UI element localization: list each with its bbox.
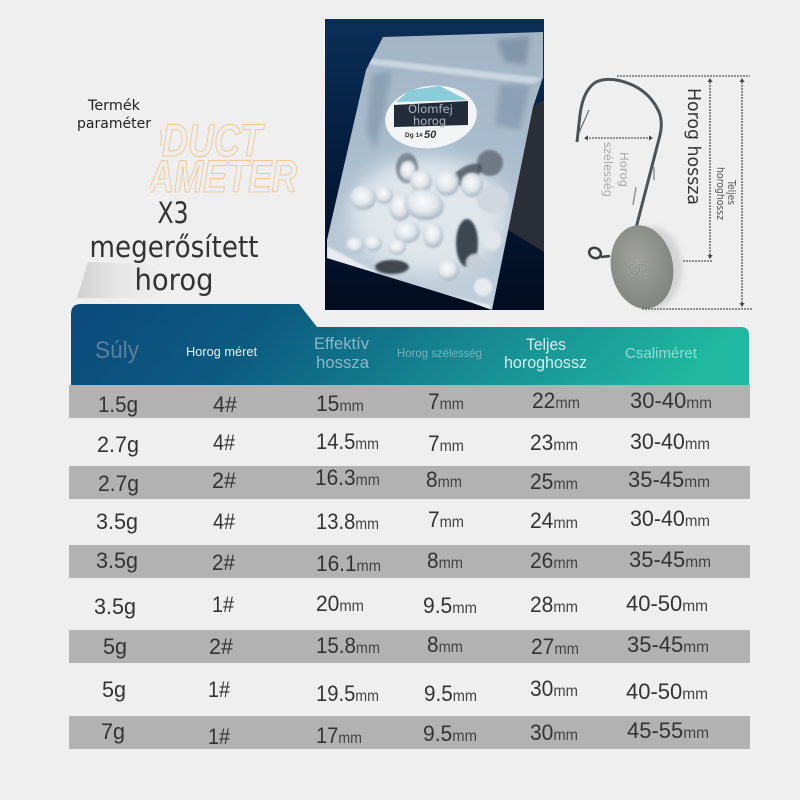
outlined watermark: product parameter: PARAMETER: [77, 151, 297, 202]
bag label: Olomfej horog: Dg 1#: [405, 132, 423, 139]
label: Teljes horoghossz: Teljes: [725, 179, 737, 205]
header: Effektív hossza: hossza: [316, 353, 370, 372]
row 4: 3.5g: [96, 509, 138, 534]
title: X3 reinforced hook: X3: [158, 196, 188, 230]
row 9: 45-55mm: [627, 718, 709, 743]
table header: [71, 304, 749, 385]
row 4: 13.8mm: [316, 509, 379, 534]
row 5: 16.1mm: [316, 551, 381, 576]
row stripe backgrounds: [69, 385, 750, 749]
row 2: [97, 429, 710, 457]
row 8: 5g: [102, 677, 126, 702]
icon: jig hook: [577, 79, 682, 314]
icon: jig hook: 5: [623, 262, 653, 276]
row 2: 23mm: [530, 430, 578, 455]
row 4: [96, 506, 710, 534]
bag label: Olomfej horog: 50: [424, 129, 437, 141]
outlined watermark: product parameter: PRODUCT: [84, 115, 265, 166]
header: Effektív hossza: Effektív: [314, 334, 369, 353]
header: Horog méret: Horog méret: [186, 344, 257, 359]
row 9: 7g: [101, 719, 125, 744]
label: Termék paraméter: paraméter: [77, 116, 151, 132]
row 2: 14.5mm: [316, 429, 379, 454]
row 2: 2.7g: [97, 432, 139, 457]
row 8: 9.5mm: [424, 681, 477, 706]
header: Effektív hossza: [314, 334, 370, 372]
header: Teljes horoghossz: Teljes: [526, 335, 566, 354]
diagram: hook with dimensions: [577, 76, 752, 314]
row 4: 4#: [213, 509, 236, 534]
outlined watermark: product parameter: [150, 124, 298, 192]
row 7: 35-45mm: [627, 632, 709, 657]
row 5: 35-45mm: [629, 547, 711, 572]
row 8: 19.5mm: [316, 681, 379, 706]
label: Horog hossza: Horog hossza: [683, 88, 704, 205]
row 5: 3.5g: [96, 548, 138, 573]
label: Horog szélesség: [601, 142, 631, 197]
header: Csaliméret: Csaliméret: [625, 345, 698, 362]
label: Termék paraméter: [77, 98, 151, 132]
row 3: 16.3mm: [315, 465, 380, 490]
row 1: 30-40mm: [630, 388, 712, 413]
row 7: 15.8mm: [316, 633, 380, 658]
row 7: 8mm: [427, 632, 463, 657]
row 1: 15mm: [316, 391, 364, 416]
dashed dimension lines: [586, 76, 752, 309]
row 3: 25mm: [530, 469, 578, 494]
row 1: 1.5g: [98, 392, 138, 417]
row 9: [101, 718, 709, 749]
title: X3 reinforced hook: megerősített: [90, 230, 258, 264]
header: Teljes horoghossz: horoghossz: [504, 353, 587, 372]
row 9: 30mm: [530, 720, 578, 745]
row 9: 9.5mm: [423, 721, 477, 746]
row 1: 7mm: [428, 389, 464, 414]
row 1: 4#: [213, 392, 238, 417]
label: Horog szélesség: Horog: [617, 152, 631, 187]
row 7: 5g: [103, 634, 127, 659]
row 3: 2.7g: [98, 471, 139, 496]
row 5: 8mm: [427, 548, 463, 573]
row 6: 28mm: [530, 592, 578, 617]
row 6: 9.5mm: [423, 593, 477, 618]
row 5: [96, 547, 711, 576]
arrowheads: [584, 78, 744, 307]
row 2: 4#: [213, 430, 236, 455]
row 3: [98, 465, 710, 496]
row 1: 22mm: [532, 388, 580, 413]
header: Teljes horoghossz: [504, 335, 587, 372]
row 2: 7mm: [428, 431, 464, 456]
bag label: Olomfej horog: Olomfej: [408, 102, 453, 116]
row 6: 40-50mm: [626, 591, 708, 616]
row 3: 35-45mm: [628, 467, 710, 492]
row 6: 3.5g: [94, 594, 136, 619]
row 5: 26mm: [530, 548, 578, 573]
label: Teljes horoghossz: horoghossz: [714, 167, 726, 220]
row 4: 24mm: [530, 508, 578, 533]
label: Teljes horoghossz: [714, 167, 737, 220]
bag label: Olomfej horog: [385, 86, 477, 148]
label: Termék paraméter: Termék: [87, 98, 141, 114]
row 4: 7mm: [428, 507, 464, 532]
row 1: [98, 388, 712, 417]
row 8: 1#: [208, 677, 231, 702]
row 7: 2#: [209, 634, 234, 659]
row 8: 30mm: [530, 676, 578, 701]
row 4: 30-40mm: [630, 506, 710, 531]
row 8: 40-50mm: [626, 679, 708, 704]
row 6: 20mm: [316, 591, 364, 616]
title: X3 reinforced hook: horog: [134, 263, 214, 297]
title: X3 reinforced hook: [90, 196, 258, 297]
row 8: [102, 676, 708, 706]
header: Horog szélesség: Horog szélesség: [397, 346, 482, 360]
row 9: 17mm: [316, 723, 362, 748]
row 9: 1#: [208, 724, 231, 749]
row 2: 30-40mm: [630, 429, 710, 454]
row 3: 8mm: [426, 467, 462, 492]
row 7: 27mm: [531, 634, 579, 659]
header: Súly: Súly: [95, 337, 139, 364]
row 7: [103, 632, 709, 659]
table rows: [69, 385, 750, 749]
heading: product parameter: [77, 98, 297, 202]
row 6: [94, 591, 708, 619]
bag label: Olomfej horog: horog: [413, 114, 446, 128]
product photo: bag of jig heads: [325, 19, 544, 310]
row 3: 2#: [212, 468, 237, 493]
label: Horog szélesség: szélesség: [601, 142, 615, 197]
row 5: 2#: [212, 550, 236, 575]
pale shape behind title: [77, 262, 190, 298]
row 6: 1#: [212, 592, 235, 617]
